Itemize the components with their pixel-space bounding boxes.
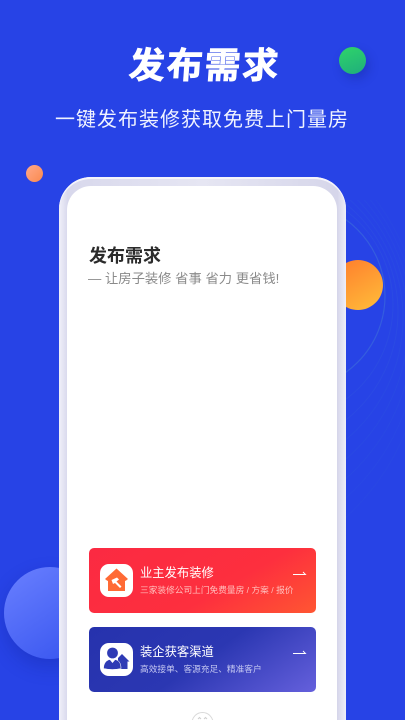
card: company — [89, 627, 316, 692]
icon: scroll hint — [192, 712, 213, 720]
screen heading: 发布需求 — [89, 246, 161, 266]
icon: orange house — [100, 564, 133, 597]
card description: 三家装修公司上门免费量房 / 方案 / 报价 — [140, 584, 293, 594]
card title: 装企获客渠道 — [140, 644, 214, 658]
light blue circle — [4, 567, 96, 659]
card: owner — [89, 548, 316, 613]
title: 发布需求 — [128, 45, 282, 86]
card description: 高效接单、客源充足、精准客户 — [140, 664, 262, 674]
screen tagline: — 让房子装修 省事 省力 更省钱! — [88, 271, 279, 286]
arrow — [293, 650, 306, 654]
phone screen — [67, 186, 337, 720]
subtitle: 一键发布装修获取免费上门量房 — [55, 109, 349, 131]
green circle — [339, 47, 366, 74]
decorative concentric arcs — [346, 219, 386, 373]
card title: 业主发布装修 — [140, 566, 214, 580]
icon: person and house — [100, 643, 133, 676]
large orange circle — [333, 260, 383, 310]
phone mockup — [58, 177, 346, 720]
arrow — [293, 572, 306, 575]
small orange circle — [26, 164, 42, 182]
